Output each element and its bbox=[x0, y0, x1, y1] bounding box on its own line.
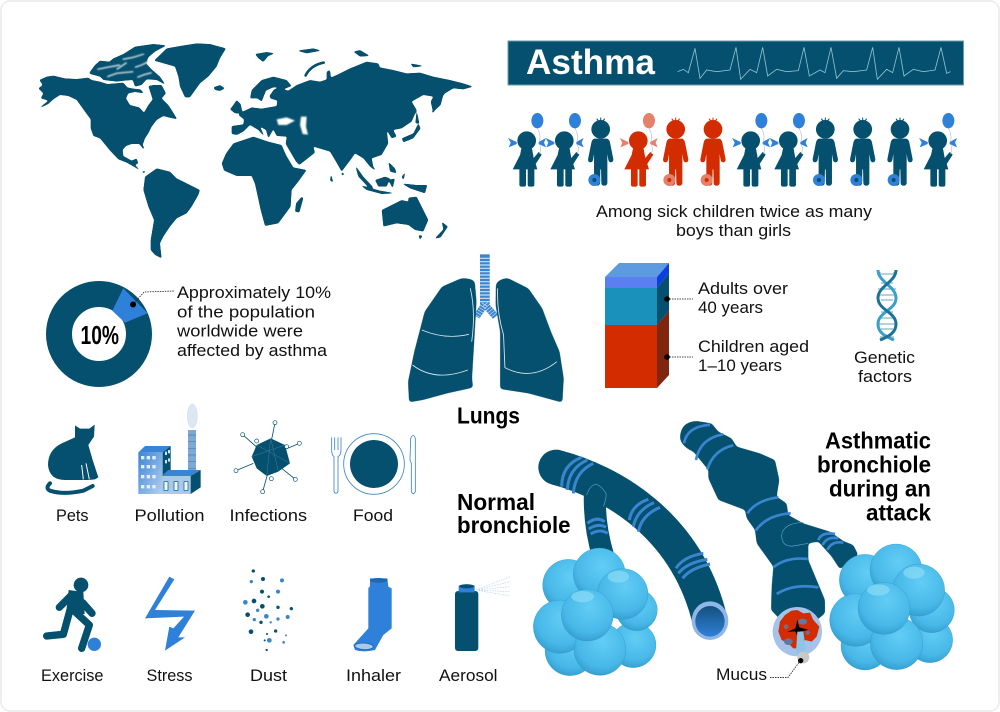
South America bbox=[143, 168, 200, 258]
lungs label: Lungs bbox=[457, 402, 520, 428]
title: Asthma bbox=[526, 43, 656, 82]
boy bbox=[850, 118, 875, 186]
asthmatic bronchiole label: attack bbox=[866, 500, 931, 526]
main tube bbox=[556, 467, 710, 621]
girl bbox=[770, 113, 808, 187]
boy bbox=[588, 118, 613, 186]
centre value: 10% bbox=[80, 320, 119, 350]
mucus callout bbox=[716, 661, 800, 684]
sick girl bbox=[620, 113, 658, 187]
girl bbox=[919, 113, 957, 187]
smoke bbox=[187, 404, 197, 428]
children label: 1–10 years bbox=[698, 356, 782, 375]
rings bbox=[684, 425, 843, 594]
donut description: of the population bbox=[177, 302, 315, 322]
left alveoli cluster bbox=[533, 548, 657, 676]
donut description: Approximately 10% bbox=[177, 283, 331, 302]
icon: runner bbox=[47, 578, 101, 651]
Canadian Arctic bbox=[89, 44, 167, 87]
islands bbox=[382, 197, 428, 232]
normal bronchiole label: Normal bbox=[457, 489, 535, 515]
genetic factors label bbox=[854, 348, 916, 386]
trigger labels: Exercise bbox=[41, 666, 104, 685]
trigger labels: Pollution bbox=[134, 506, 204, 525]
left lung bbox=[408, 278, 477, 402]
boy bbox=[813, 118, 838, 186]
asthmatic bronchiole label: Asthmatic bbox=[825, 428, 931, 454]
trigger labels: Infections bbox=[230, 506, 307, 525]
rings bbox=[562, 457, 710, 578]
branch tube bbox=[595, 490, 603, 557]
trigger labels: Pets bbox=[56, 506, 88, 525]
girl bbox=[546, 113, 584, 187]
North America bbox=[37, 76, 177, 173]
genetic factors label: factors bbox=[858, 367, 912, 386]
right lung bbox=[496, 278, 564, 403]
title banner bbox=[508, 41, 964, 85]
chimney bbox=[188, 430, 196, 473]
normal bronchiole label bbox=[457, 489, 570, 538]
girl bbox=[508, 113, 546, 187]
children segment bbox=[605, 325, 657, 388]
children label: Children aged bbox=[698, 337, 809, 356]
sick boy bbox=[700, 118, 726, 186]
children caption bbox=[596, 202, 873, 240]
icon: dust bbox=[243, 569, 293, 651]
icon: cat bbox=[47, 425, 98, 493]
icon: factory bbox=[138, 404, 201, 494]
adults label: 40 years bbox=[698, 298, 763, 317]
normal bronchiole label: bronchiole bbox=[457, 512, 570, 538]
sick boy bbox=[663, 118, 688, 186]
spray bbox=[476, 577, 510, 596]
donut description: worldwide were bbox=[176, 322, 303, 340]
asthmatic bronchiole label bbox=[817, 428, 931, 526]
asthmatic bronchiole bbox=[680, 421, 858, 663]
children row bbox=[508, 113, 957, 187]
age bar bbox=[605, 263, 693, 388]
trigger labels: Stress bbox=[146, 666, 192, 685]
boy bbox=[887, 118, 913, 186]
asthmatic bronchiole label: bronchiole bbox=[817, 452, 931, 478]
trigger labels: Food bbox=[353, 506, 393, 525]
leader lines bbox=[667, 299, 693, 357]
heartbeat line bbox=[678, 47, 951, 79]
icon: plate and cutlery bbox=[332, 434, 415, 494]
icon: aerosol bbox=[455, 577, 510, 651]
Black Sea and Caspian bbox=[255, 110, 308, 135]
constricted tube bbox=[680, 421, 858, 637]
world map bbox=[37, 43, 473, 258]
highlighted wedge bbox=[112, 288, 148, 323]
children label bbox=[698, 337, 809, 375]
icon: lightning bolt bbox=[145, 577, 195, 651]
Africa bbox=[222, 137, 307, 226]
adults segment bbox=[605, 288, 657, 325]
children caption: Among sick children twice as many bbox=[596, 202, 873, 221]
trigger labels: Aerosol bbox=[439, 666, 498, 685]
asthmatic bronchiole label: during an bbox=[829, 476, 931, 502]
triggers icons bbox=[47, 404, 510, 651]
trigger labels: Inhaler bbox=[346, 666, 401, 685]
mucus callout: Mucus bbox=[716, 665, 767, 684]
leader line bbox=[133, 291, 175, 304]
icon: virus bbox=[234, 421, 301, 494]
lungs bbox=[408, 254, 564, 403]
donut chart 10% bbox=[59, 288, 175, 374]
donut description: affected by asthma bbox=[177, 341, 328, 360]
trigger labels bbox=[41, 506, 498, 685]
icon: DNA bbox=[878, 270, 896, 340]
adults label: Adults over bbox=[698, 279, 788, 298]
tube opening bbox=[692, 601, 728, 640]
genetic factors label: Genetic bbox=[854, 348, 916, 367]
girl bbox=[732, 113, 770, 187]
icon: inhaler bbox=[353, 578, 392, 651]
normal bronchiole bbox=[556, 457, 728, 640]
adults label bbox=[698, 279, 788, 317]
airway cross-section with mucus bbox=[773, 607, 822, 663]
donut description bbox=[176, 283, 331, 360]
trachea bbox=[477, 254, 496, 317]
right alveoli cluster bbox=[830, 544, 954, 670]
Greenland bbox=[154, 43, 226, 97]
children caption: boys than girls bbox=[676, 221, 791, 240]
Eurasia bbox=[232, 62, 473, 172]
trigger labels: Dust bbox=[250, 666, 287, 685]
